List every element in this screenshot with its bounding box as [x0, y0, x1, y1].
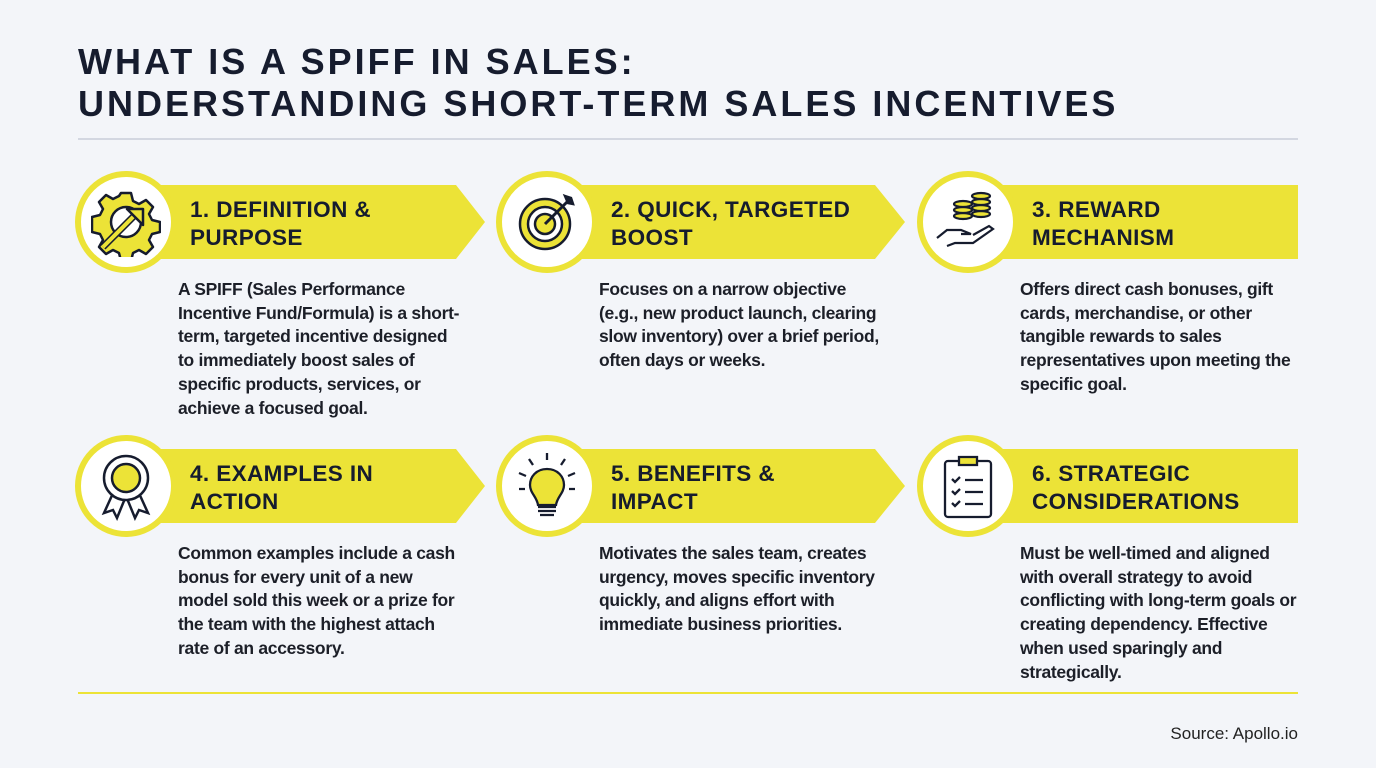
heading [1032, 197, 1174, 250]
heading [1032, 461, 1240, 514]
icon: light bulb [496, 435, 598, 537]
text: Offers direct cash bonuses, gift cards, merchandise, or other tangible rewards to sales representatives upon meeting the specific goal. [1020, 279, 1290, 394]
heading: 6. STRATEGIC [1032, 461, 1190, 486]
title: UNDERSTANDING SHORT-TERM SALES INCENTIVES [78, 83, 1118, 124]
text: Must be well-timed and aligned with overall strategy to avoid conflicting with long-term goals or creating dependency. Effective when used sparingly and strategically. [1020, 543, 1296, 682]
heading: 2. QUICK, TARGETED [611, 197, 850, 222]
title [78, 41, 1118, 124]
icon: coins hand [917, 171, 1019, 273]
panel: strategic [917, 435, 1298, 682]
icon: gear arrow [75, 171, 177, 273]
heading: MECHANISM [1032, 225, 1174, 250]
panel: definition [75, 171, 485, 418]
panel: benefits [496, 435, 905, 634]
title: WHAT IS A SPIFF IN SALES: [78, 41, 636, 82]
heading: 3. REWARD [1032, 197, 1161, 222]
heading: 1. DEFINITION & [190, 197, 371, 222]
panel: quick boost [496, 171, 905, 370]
heading: 4. EXAMPLES IN [190, 461, 373, 486]
text: A SPIFF (Sales Performance Incentive Fund/Formula) is a short-term, targeted incentive designed to immediately boost sales of specific products, services, or achieve a focused goal. [178, 279, 459, 418]
heading: ACTION [190, 489, 279, 514]
panel: reward [917, 171, 1298, 394]
icon: award [75, 435, 177, 537]
text: Motivates the sales team, creates urgency, moves specific inventory quickly, and aligns effort with immediate business priorities. [599, 543, 875, 634]
heading: 5. BENEFITS & [611, 461, 775, 486]
heading [190, 461, 373, 514]
heading: CONSIDERATIONS [1032, 489, 1240, 514]
heading [611, 197, 850, 250]
text: Common examples include a cash bonus for every unit of a new model sold this week or a prize for the team with the highest attach rate of an accessory. [178, 543, 455, 658]
heading [611, 461, 775, 514]
icon: target [496, 171, 598, 273]
heading [190, 197, 371, 250]
text: Focuses on a narrow objective (e.g., new product launch, clearing slow inventory) over a brief period, often days or weeks. [599, 279, 879, 370]
heading: PURPOSE [190, 225, 303, 250]
panel: examples [75, 435, 485, 658]
source: Source: Apollo.io [1170, 724, 1298, 743]
heading: IMPACT [611, 489, 698, 514]
heading: BOOST [611, 225, 693, 250]
icon: clipboard [917, 435, 1019, 537]
